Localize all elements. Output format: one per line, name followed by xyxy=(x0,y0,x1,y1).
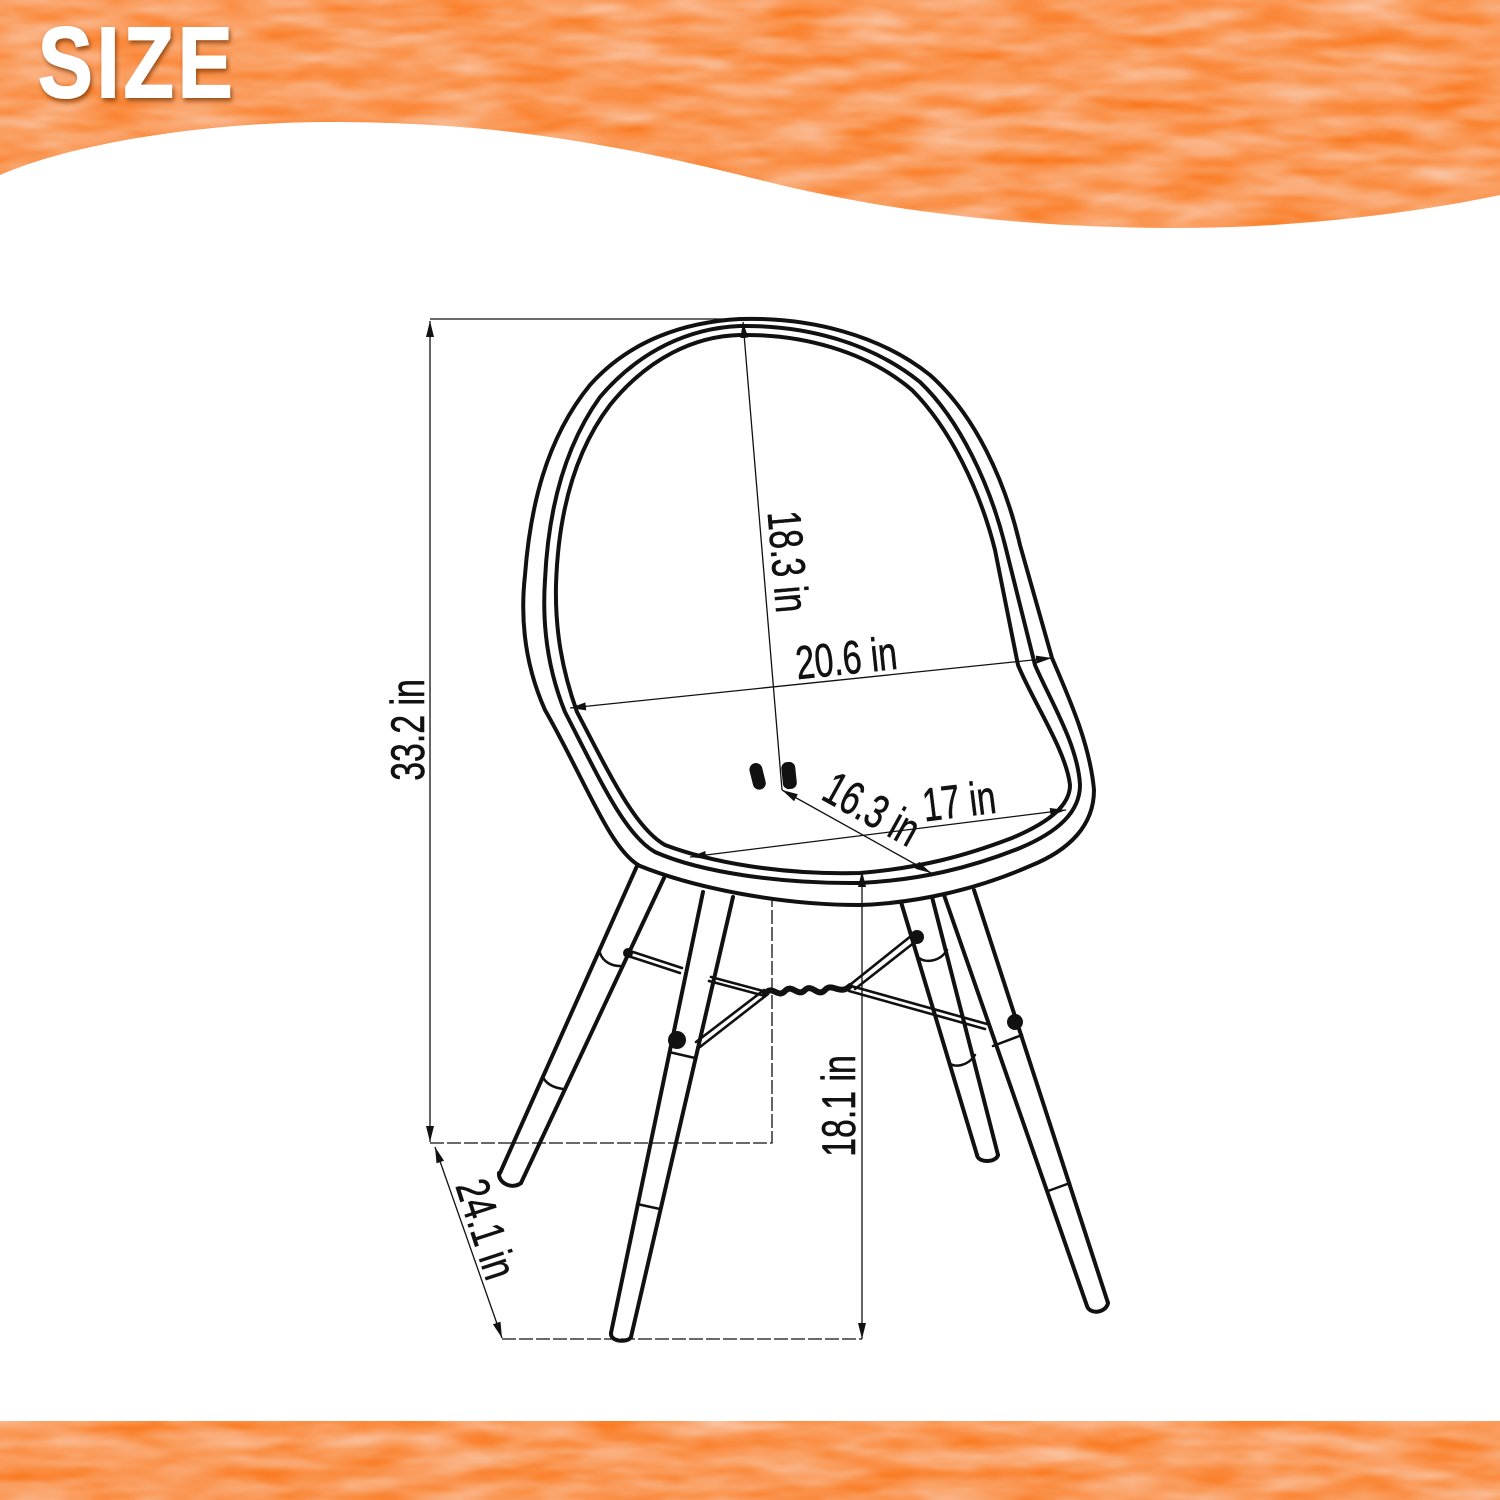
label: back height: 18.3 in xyxy=(757,509,819,614)
dimension labels xyxy=(382,509,999,1285)
depth dimension line xyxy=(435,1147,502,1338)
seat holes xyxy=(748,761,797,791)
chair technical drawing xyxy=(499,319,1108,1341)
label: seat width: 17 in xyxy=(919,770,999,832)
seat shell outlines xyxy=(523,319,1094,905)
back height dimension line xyxy=(743,322,782,790)
front left leg xyxy=(611,892,733,1341)
rear right leg xyxy=(901,897,998,1161)
front right leg xyxy=(944,890,1108,1312)
rear left leg xyxy=(499,866,664,1186)
seat width dimension line xyxy=(690,810,1066,857)
seat depth dimension line xyxy=(782,790,931,873)
rear base dashed lines xyxy=(430,900,772,1143)
front base dashed line xyxy=(502,1338,862,1340)
seat height dimension line xyxy=(861,871,863,1339)
chair legs xyxy=(499,866,1108,1341)
label: overall depth: 24.1 in xyxy=(445,1173,527,1285)
brace joint dots xyxy=(623,930,1023,1049)
cross brace wires xyxy=(625,932,987,1047)
label: back width: 20.6 in xyxy=(793,626,900,690)
panel: top orange textured header xyxy=(0,0,1500,235)
label: seat depth: 16.3 in xyxy=(815,761,929,857)
dimension lines xyxy=(430,319,1066,1339)
back width dimension line xyxy=(570,658,1052,708)
label: seat height: 18.1 in xyxy=(813,1055,865,1157)
label: overall height: 33.2 in xyxy=(382,679,434,781)
height dimension line xyxy=(430,318,740,320)
title: SIZE xyxy=(38,7,237,119)
panel: bottom orange textured band xyxy=(0,1420,1500,1500)
